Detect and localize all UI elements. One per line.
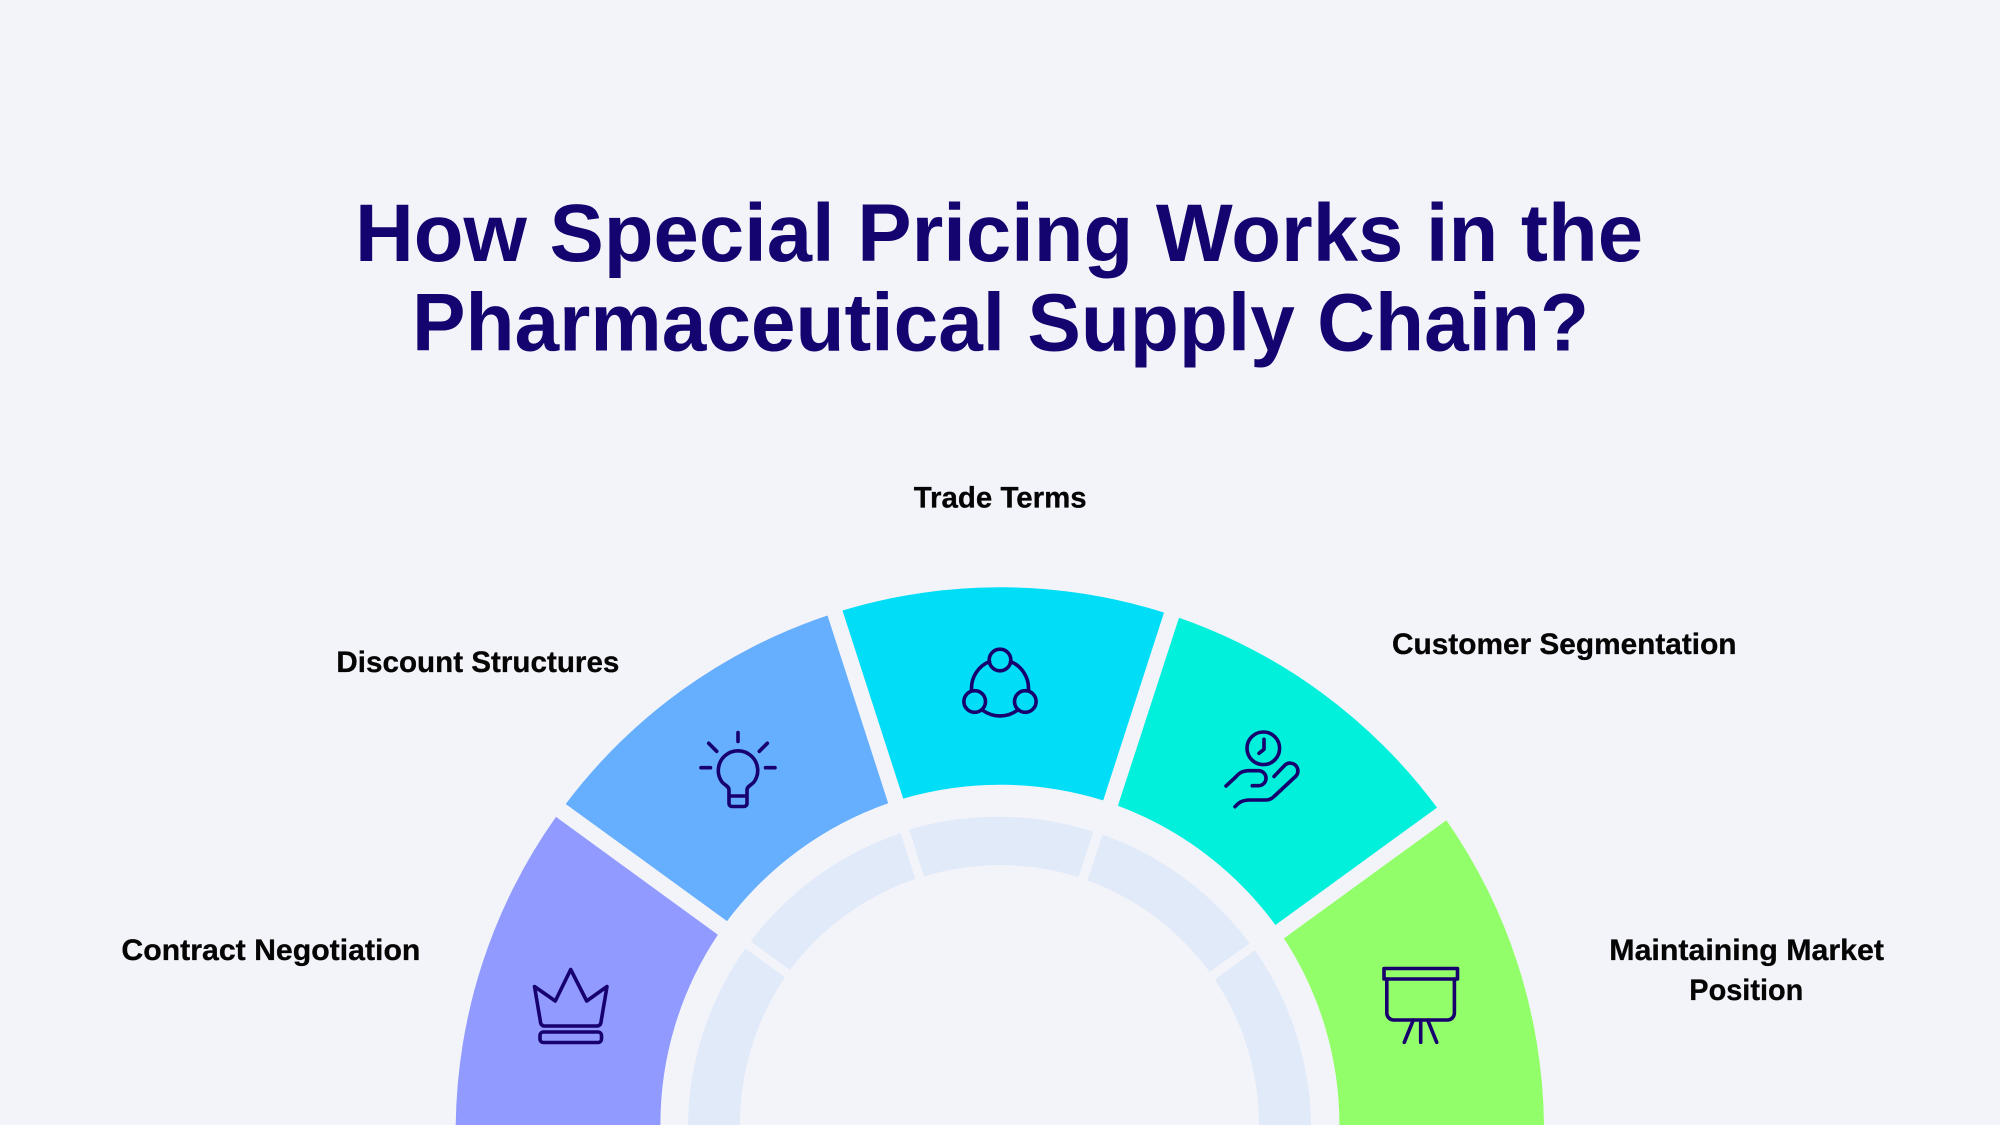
- title: [355, 188, 1643, 368]
- label: Maintaining Market Position: Maintaining Market: [1609, 934, 1884, 967]
- segment: Trade Terms: [842, 587, 1164, 800]
- segment: Contract Negotiation: [456, 817, 718, 1125]
- inner ring of pale segments: [688, 817, 1311, 1125]
- icon: light bulb: [701, 732, 775, 806]
- title: How Special Pricing Works in the: [355, 188, 1643, 279]
- title: Pharmaceutical Supply Chain?: [412, 278, 1589, 368]
- icon: presentation board: [1384, 968, 1458, 1042]
- label: Maintaining Market Position: Position: [1689, 974, 1803, 1007]
- segment: Discount Structures: [566, 616, 888, 921]
- label: Customer Segmentation: Customer Segmentation: [1392, 628, 1736, 661]
- segment: Customer Segmentation: [1118, 618, 1437, 925]
- label: Discount Structures: Discount Structures: [336, 646, 619, 679]
- icon: connected circles: [964, 649, 1036, 716]
- label: Contract Negotiation: Contract Negotiation: [121, 934, 420, 967]
- icon: hand holding clock: [1226, 732, 1298, 807]
- label: Maintaining Market Position: [1609, 934, 1884, 1007]
- segment: Maintaining Market Position: [1284, 820, 1544, 1125]
- label: Trade Terms: Trade Terms: [914, 482, 1087, 514]
- icon: crown: [534, 970, 607, 1042]
